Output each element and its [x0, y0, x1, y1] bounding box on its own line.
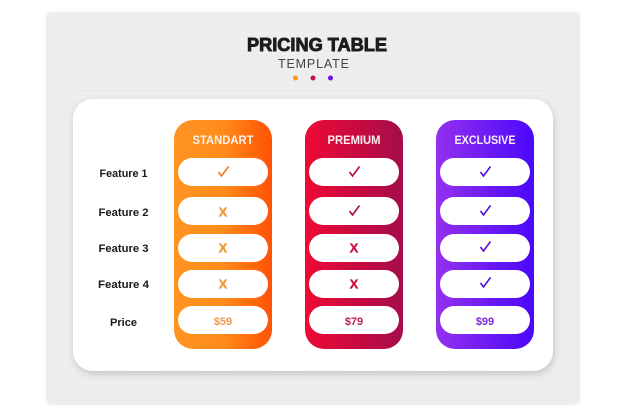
- feature labels: Feature 2: [98, 207, 148, 219]
- standart marks: X: [219, 204, 228, 220]
- premium marks: [350, 240, 359, 292]
- exclusive price: $99: [476, 316, 494, 328]
- standart heading: STANDART: [192, 133, 254, 147]
- standart marks: [219, 204, 228, 292]
- decorative colour dots: [293, 76, 333, 80]
- standart marks: X: [219, 276, 228, 292]
- feature labels: Price: [110, 317, 137, 329]
- exclusive checks: [480, 166, 490, 287]
- panel: exclusive column: [436, 120, 534, 349]
- premium checks: [350, 166, 360, 215]
- standart rows: [178, 158, 268, 334]
- title: PRICING TABLE: [247, 35, 387, 55]
- standart check: [218, 166, 228, 176]
- feature labels: Feature 1: [100, 168, 148, 180]
- premium marks: X: [350, 240, 359, 256]
- textured background panel: [48, 14, 578, 403]
- premium rows: [309, 158, 399, 334]
- standart price: $59: [214, 316, 232, 328]
- panel: premium column: [305, 120, 403, 349]
- exclusive heading: EXCLUSIVE: [454, 133, 516, 147]
- feature labels: Feature 4: [98, 279, 150, 291]
- premium heading: PREMIUM: [328, 133, 380, 147]
- panel: standart column: [174, 120, 272, 349]
- standart marks: X: [219, 240, 228, 256]
- premium marks: X: [350, 276, 359, 292]
- panel: white pricing card: [73, 99, 553, 371]
- premium price: $79: [345, 316, 363, 328]
- feature labels: [98, 168, 150, 329]
- subtitle: TEMPLATE: [278, 57, 349, 71]
- title: [247, 35, 387, 71]
- exclusive rows: [440, 158, 530, 334]
- feature labels: Feature 3: [98, 243, 148, 255]
